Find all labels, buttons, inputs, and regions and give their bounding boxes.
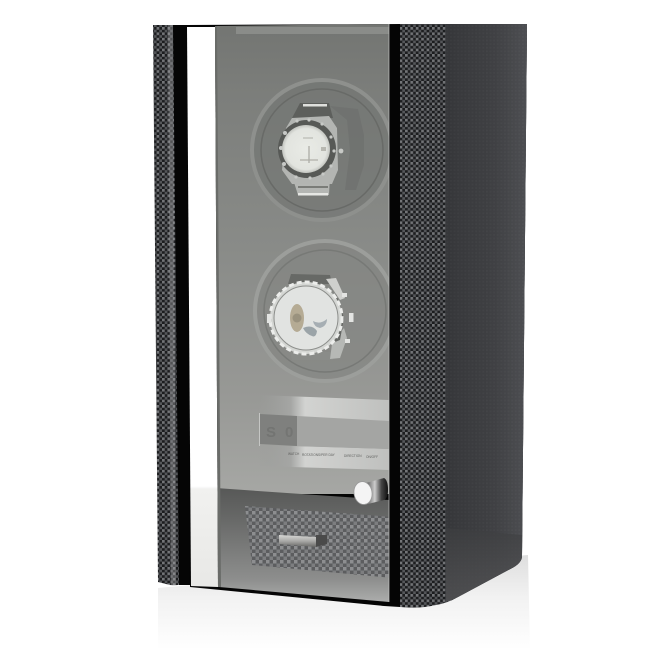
watch 1 bracelet: [294, 184, 330, 195]
display dark part: [260, 414, 297, 446]
drawer: [245, 506, 393, 578]
panel labels: DIRECTION: [344, 454, 362, 458]
watch 2 dark strap: [288, 274, 332, 284]
door knob: [352, 478, 388, 506]
watch 2 crowns and pushers: [267, 293, 354, 343]
floor reflection: [158, 555, 530, 650]
left carbon edge: [153, 25, 191, 585]
left edge black recess: [173, 25, 191, 585]
front black frame: [187, 24, 400, 607]
panel labels: ON/OFF: [366, 455, 378, 459]
watch 2 lugs: [326, 278, 345, 300]
side panel lower reflection: [446, 528, 522, 602]
watch 2: [267, 274, 354, 360]
panel labels: WATCH: [288, 452, 300, 456]
watch 1 bezel: [278, 120, 336, 178]
side panel dark fine weave: [446, 24, 527, 602]
silver upper band: [281, 396, 389, 421]
top lighter band: [236, 27, 389, 34]
glass door: [215, 24, 395, 602]
display light part: [297, 416, 388, 434]
side panel carbon fade: [418, 24, 527, 606]
panel labels: [288, 452, 378, 458]
watch 1 dial: [282, 125, 330, 173]
display digits: S: [266, 424, 276, 441]
winder ring 1: [252, 80, 392, 220]
watch 1 case lugs: [282, 116, 338, 184]
watch 1: [278, 103, 344, 196]
control panel: 0: [285, 424, 293, 441]
winder ring 2: [255, 241, 395, 381]
product illustration: watch winder cabinet: [153, 24, 529, 618]
drawer handle: [279, 535, 327, 547]
glass left edge shadow: [215, 26, 221, 587]
glass right edge highlight: [388, 24, 390, 602]
watch 1 dark strap: [292, 103, 333, 118]
silver lower band: [291, 446, 389, 470]
control panel: [258, 395, 389, 470]
watch 2 moon phase: [303, 327, 317, 336]
left edge highlight stripe: [168, 25, 176, 585]
lower dark glass section: [215, 488, 389, 602]
white glass strip: [187, 27, 218, 587]
watch 2 dial: [274, 286, 338, 350]
right side panel: [400, 24, 527, 608]
watch 2 scalloped bezel: [270, 282, 342, 354]
watch 2 open heart: [290, 304, 304, 332]
panel labels: ROTATIONS/PER DAY: [302, 453, 336, 457]
